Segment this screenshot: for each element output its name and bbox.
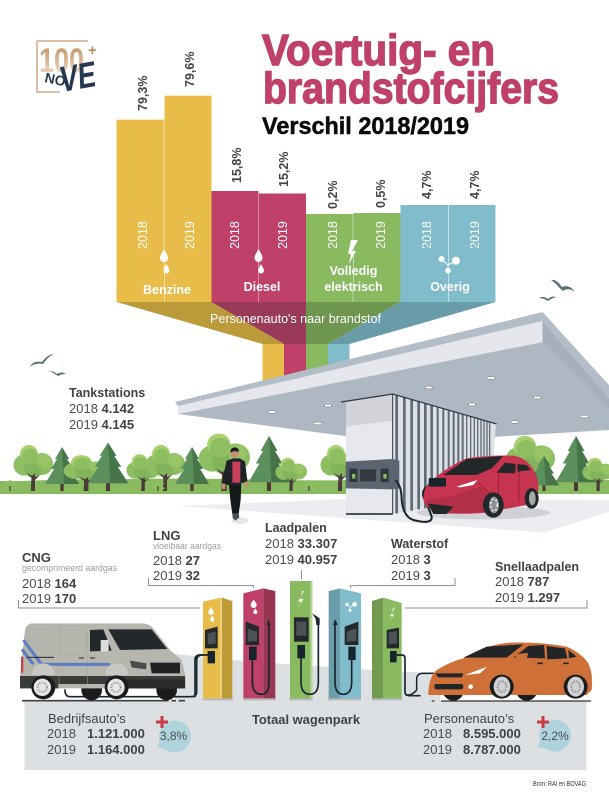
charger panel bbox=[346, 459, 399, 489]
Personenauto's figures: 8.787.000 bbox=[463, 742, 521, 757]
LNG figures: LNG bbox=[153, 528, 180, 543]
Personenauto's figures: 2019 bbox=[423, 742, 452, 757]
bar chart: volledig elektrisch: Volledig bbox=[330, 264, 377, 278]
tankstations figures: Tankstations bbox=[69, 386, 145, 400]
icon: lightning bolt bbox=[348, 240, 358, 264]
icon: drops bbox=[254, 249, 264, 274]
orange car bbox=[406, 642, 592, 701]
LNG figures: 2018 27 bbox=[153, 553, 200, 568]
pump: pink bbox=[243, 588, 276, 700]
canopy lamps bbox=[268, 377, 589, 425]
Laadpalen figures bbox=[265, 521, 337, 567]
bar chart: diesel: 2019 bbox=[276, 221, 290, 249]
bar chart: volledig elektrisch: 0,2% bbox=[326, 180, 340, 209]
total fleet panel bbox=[24, 701, 586, 770]
Personenauto's figures: Personenauto’s bbox=[424, 711, 515, 726]
Bedrijfsauto's figures: 2019 bbox=[47, 742, 76, 757]
red electric car bbox=[396, 456, 550, 522]
pump: yellow bbox=[195, 598, 233, 700]
bar chart: benzine: Benzine bbox=[143, 283, 191, 297]
ground band bbox=[0, 479, 609, 494]
source: Bron: RAI en BOVAG bbox=[533, 781, 586, 788]
Laadpalen figures: 2019 40.957 bbox=[265, 552, 337, 567]
logo: 100+ Nové: 100 bbox=[39, 42, 84, 80]
walking man bbox=[222, 447, 248, 524]
logo: 100+ Nové: + bbox=[88, 42, 97, 59]
charging building bbox=[341, 394, 497, 514]
Personenauto's figures: 8.595.000 bbox=[463, 726, 521, 741]
Bedrijfsauto's figures: 1.164.000 bbox=[87, 742, 145, 757]
bar chart: volledig elektrisch bbox=[306, 180, 400, 302]
bar chart: benzine: 2019 bbox=[183, 221, 197, 249]
Snellaadpalen figures: Snellaadpalen bbox=[495, 560, 579, 574]
title bbox=[262, 26, 559, 113]
subtitle: Verschil 2018/2019 bbox=[262, 113, 469, 140]
birds left bbox=[30, 354, 66, 376]
CNG figures: 2019 170 bbox=[22, 591, 76, 606]
Waterstof figures bbox=[391, 537, 449, 583]
striped wall bbox=[393, 394, 496, 514]
callout: +2,2%: 2,2% bbox=[541, 729, 569, 743]
pump: green 2 bbox=[372, 598, 420, 700]
funnel label: Personenauto's naar brandstof bbox=[210, 311, 381, 326]
bar chart: overig: Overig bbox=[430, 280, 470, 294]
Laadpalen figures: Laadpalen bbox=[265, 521, 327, 535]
van bbox=[20, 623, 210, 701]
bar chart: overig bbox=[400, 170, 496, 302]
bracket: laadpalen bbox=[300, 570, 302, 579]
callout: +2,2% bbox=[537, 716, 571, 752]
icon: drops bbox=[160, 249, 170, 274]
Waterstof figures: 2018 3 bbox=[391, 552, 431, 567]
tankstations figures: 2019 4.145 bbox=[69, 417, 134, 432]
pump: blue bbox=[328, 588, 361, 700]
trees left bbox=[2, 434, 360, 491]
CNG figures bbox=[22, 550, 117, 606]
bar chart: volledig elektrisch: 2019 bbox=[374, 221, 388, 249]
bar chart: benzine: 79,6% bbox=[183, 52, 197, 87]
bar chart: diesel: Diesel bbox=[244, 280, 280, 294]
LNG figures: 2019 32 bbox=[153, 568, 200, 583]
Personenauto's figures bbox=[423, 711, 521, 757]
bar chart: diesel: 15,8% bbox=[230, 148, 244, 183]
bar chart: benzine: 2018 bbox=[136, 221, 150, 249]
Snellaadpalen figures: 2018 787 bbox=[495, 574, 549, 589]
pumps bbox=[195, 581, 420, 700]
CNG figures: 2018 164 bbox=[22, 576, 77, 591]
bar chart: overig: 4,7% bbox=[468, 170, 482, 199]
bar chart: volledig elektrisch: 2018 bbox=[326, 221, 340, 249]
canopy bbox=[175, 312, 609, 437]
Snellaadpalen figures: 2019 1.297 bbox=[495, 590, 560, 605]
Personenauto's figures: 2018 bbox=[423, 726, 452, 741]
birds right bbox=[539, 280, 575, 301]
Bedrijfsauto's figures: 1.121.000 bbox=[87, 726, 145, 741]
Bedrijfsauto's figures bbox=[47, 711, 145, 757]
bar chart: volledig elektrisch: elektrisch bbox=[324, 280, 383, 294]
bar chart: volledig elektrisch: 0,5% bbox=[374, 180, 388, 208]
Bedrijfsauto's figures: Bedrijfsauto’s bbox=[48, 711, 126, 726]
logo: 100+ Nové bbox=[37, 41, 100, 100]
Snellaadpalen figures bbox=[495, 560, 579, 605]
Laadpalen figures: 2018 33.307 bbox=[265, 536, 337, 551]
title: Voertuig- en bbox=[262, 26, 495, 75]
logo: 100+ Nové: VE bbox=[56, 53, 100, 100]
bar chart: overig: 2019 bbox=[468, 221, 482, 249]
CNG figures: CNG bbox=[22, 550, 51, 565]
bracket: LNG bbox=[148, 578, 254, 588]
trees right bbox=[506, 436, 609, 491]
tankstations figures: 2018 4.142 bbox=[69, 401, 134, 416]
grey backdrop behind pumps bbox=[175, 654, 440, 702]
Waterstof figures: Waterstof bbox=[391, 537, 449, 551]
bar chart: diesel: 2018 bbox=[228, 221, 242, 249]
bar chart: diesel: 15,2% bbox=[277, 152, 291, 187]
title: brandstofcijfers bbox=[263, 64, 559, 113]
total label: Totaal wagenpark bbox=[252, 712, 361, 727]
CNG figures: gecomprimeerd aardgas bbox=[22, 563, 117, 573]
bar chart: overig: 4,7% bbox=[420, 170, 434, 199]
bar chart: benzine bbox=[116, 52, 212, 302]
bracket: CNG bbox=[18, 600, 200, 608]
Waterstof figures: 2019 3 bbox=[391, 568, 431, 583]
pump: green bbox=[289, 581, 320, 700]
LNG figures bbox=[153, 528, 221, 583]
callout: +3,8% bbox=[156, 716, 191, 752]
callout: +3,8%: 3,8% bbox=[160, 729, 188, 743]
tankstations figures bbox=[69, 386, 145, 432]
icon: molecule bbox=[438, 256, 460, 274]
bar chart: benzine: 79,3% bbox=[136, 76, 150, 111]
funnel bbox=[116, 302, 496, 344]
funnel chutes bbox=[262, 343, 350, 388]
bracket: waterstof bbox=[350, 578, 455, 588]
forecourt floor bbox=[179, 499, 609, 532]
logo: 100+ Nové: NO bbox=[43, 69, 67, 89]
bar chart: overig: 2018 bbox=[420, 221, 434, 249]
bracket: snellaadpalen bbox=[405, 600, 587, 608]
bar chart: diesel bbox=[212, 148, 306, 302]
Bedrijfsauto's figures: 2018 bbox=[47, 726, 76, 741]
LNG figures: vloeibaar aardgas bbox=[153, 541, 221, 551]
front wall bbox=[346, 395, 393, 514]
